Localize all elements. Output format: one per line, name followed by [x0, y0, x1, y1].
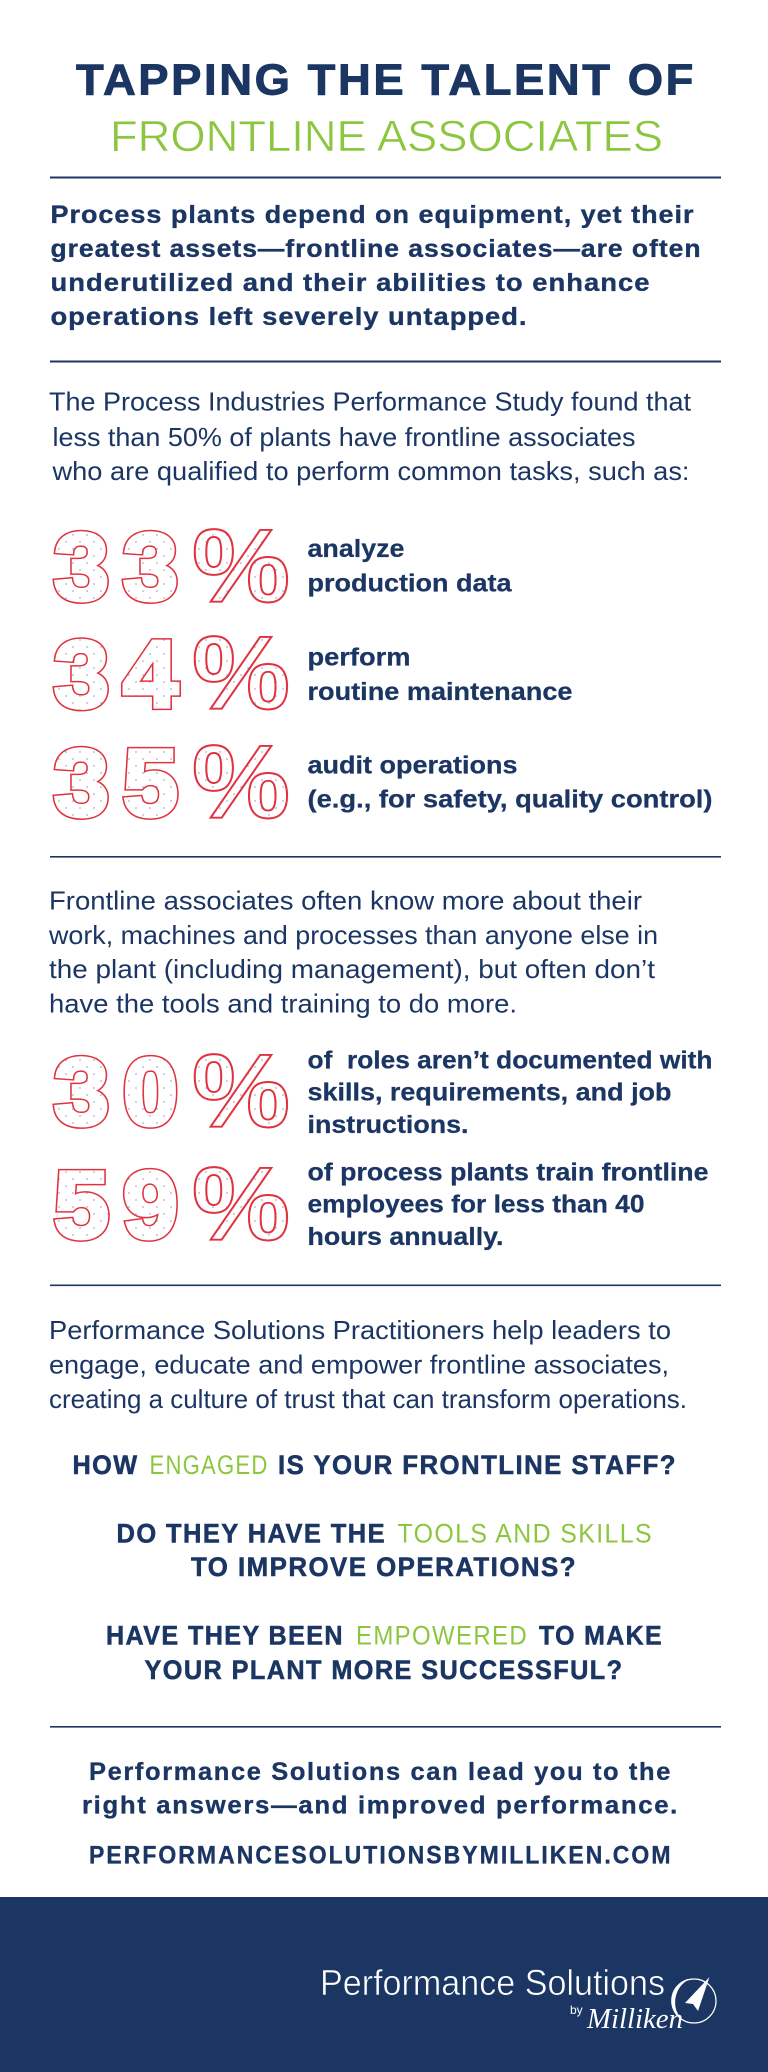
- number: 59%: %: [192, 1146, 290, 1262]
- number: 35%: 3: [54, 730, 109, 836]
- logo: Performance Solutions by Milliken: [320, 1962, 716, 2035]
- label: training hours: [308, 1158, 709, 1251]
- question: engaged: ENGAGED: [150, 1450, 268, 1480]
- question: engaged: IS YOUR FRONTLINE STAFF?: [278, 1450, 677, 1480]
- number: 33%: 3: [123, 514, 178, 620]
- intro statement: operations left severely untapped.: [50, 303, 528, 331]
- frontline knowledge text: Frontline associates often know more about their: [49, 886, 642, 916]
- title: TAPPING THE TALENT OF: [76, 56, 696, 104]
- frontline knowledge text: [48, 886, 658, 1018]
- frontline knowledge text: work, machines and processes than anyone else in: [48, 920, 658, 950]
- question: tools and skills: TOOLS AND SKILLS: [398, 1518, 653, 1548]
- label: training hours: of process plants train frontline: [308, 1158, 709, 1186]
- footer band: [0, 1897, 768, 2072]
- number: 35%: 5: [123, 730, 178, 836]
- number: 30%: 3: [54, 1040, 109, 1146]
- title: FRONTLINE ASSOCIATES: [110, 112, 663, 161]
- intro statement: Process plants depend on equipment, yet their: [50, 201, 694, 229]
- intro statement: greatest assets—frontline associates—are often: [50, 235, 702, 263]
- label: analyze production data: analyze: [308, 535, 405, 563]
- call to action: [82, 1758, 679, 1820]
- number: 30%: 3: [54, 1040, 109, 1146]
- stat: 35% audit operations: [54, 724, 712, 840]
- number: 30%: 0: [123, 1040, 178, 1146]
- number: 35%: 5: [123, 730, 178, 836]
- icon: circle with paper plane: [672, 1977, 716, 2023]
- practitioners text: [49, 1315, 687, 1414]
- stat: 34% perform routine maintenance: [54, 616, 573, 732]
- stat: 30% of roles not documented: [54, 1034, 712, 1150]
- number: 59%: [54, 1146, 290, 1262]
- question: empowered: EMPOWERED: [356, 1620, 528, 1650]
- label: audit operations: (e.g., for safety, quality control): [308, 786, 712, 814]
- question: engaged: [72, 1450, 677, 1480]
- label: perform routine maintenance: perform: [308, 644, 410, 672]
- study introduction text: [49, 386, 692, 486]
- label: training hours: employees for less than 40: [308, 1190, 644, 1218]
- label: roles not documented: instructions.: [308, 1111, 468, 1139]
- number: 33%: 3: [123, 514, 178, 620]
- practitioners text: Performance Solutions Practitioners help leaders to: [49, 1315, 671, 1345]
- number: 34%: %: [192, 616, 290, 732]
- number: 33%: 3: [54, 514, 109, 620]
- title: [76, 56, 696, 161]
- number: 59%: 9: [123, 1152, 178, 1258]
- number: 33%: 3: [54, 514, 109, 620]
- number: 59%: 9: [123, 1152, 178, 1258]
- question: empowered: TO MAKE: [539, 1620, 663, 1650]
- logo: Performance Solutions by Milliken: Milliken: [586, 2003, 683, 2035]
- number: 34%: 4: [123, 622, 178, 728]
- question: empowered: HAVE THEY BEEN: [106, 1620, 344, 1650]
- question: empowered: YOUR PLANT MORE SUCCESSFUL?: [144, 1655, 624, 1685]
- label: roles not documented: of roles aren’t documented with: [308, 1046, 712, 1074]
- number: 35%: 3: [54, 730, 109, 836]
- label: analyze production data: [308, 535, 513, 598]
- logo: Performance Solutions by Milliken: Performance Solutions: [320, 1962, 665, 2003]
- frontline knowledge text: have the tools and training to do more.: [49, 988, 517, 1018]
- number: 30%: %: [192, 1034, 290, 1150]
- label: audit operations: [308, 752, 712, 814]
- practitioners text: creating a culture of trust that can transform operations.: [49, 1384, 687, 1414]
- frontline knowledge text: the plant (including management), but often don’t: [49, 954, 656, 984]
- number: 34%: 3: [54, 622, 109, 728]
- label: training hours: hours annually.: [308, 1223, 504, 1251]
- intro statement: underutilized and their abilities to enhance: [50, 269, 650, 297]
- logo: Performance Solutions by Milliken: by: [570, 2003, 583, 2017]
- number: 59%: 5: [54, 1152, 109, 1258]
- number: 33%: %: [192, 508, 290, 624]
- call to action: right answers—and improved performance.: [82, 1792, 679, 1820]
- number: 34%: 4: [123, 622, 178, 728]
- study introduction text: less than 50% of plants have frontline associates: [52, 422, 636, 452]
- number: 30%: 0: [123, 1040, 178, 1146]
- question: engaged: HOW: [72, 1450, 138, 1480]
- number: 34%: 3: [54, 622, 109, 728]
- study introduction text: who are qualified to perform common tasks, such as:: [51, 456, 689, 486]
- study introduction text: The Process Industries Performance Study found that: [49, 386, 692, 416]
- label: perform routine maintenance: routine maintenance: [308, 678, 573, 706]
- label: perform routine maintenance: [308, 644, 573, 706]
- number: 33%: [54, 508, 290, 624]
- label: audit operations: audit operations: [308, 752, 518, 780]
- call to action: Performance Solutions can lead you to the: [89, 1758, 672, 1786]
- label: roles not documented: [308, 1046, 712, 1139]
- question: tools and skills: [116, 1518, 653, 1582]
- practitioners text: engage, educate and empower frontline associates,: [49, 1350, 669, 1380]
- question: empowered: [106, 1620, 663, 1685]
- label: analyze production data: production data: [308, 570, 513, 598]
- question: tools and skills: TO IMPROVE OPERATIONS?: [191, 1552, 577, 1582]
- number: 30%: [54, 1034, 290, 1150]
- intro statement: [50, 201, 702, 331]
- question: tools and skills: DO THEY HAVE THE: [116, 1518, 386, 1548]
- number: 59%: 5: [54, 1152, 109, 1258]
- number: 35%: [54, 724, 290, 840]
- stat: 59% train under 40 hours: [54, 1146, 709, 1262]
- website url: PERFORMANCESOLUTIONSBYMILLIKEN.COM: [89, 1842, 672, 1870]
- label: roles not documented: skills, requirements, and job: [308, 1078, 672, 1106]
- stat: 33% analyze production data: [54, 508, 513, 624]
- number: 35%: %: [192, 724, 290, 840]
- number: 34%: [54, 616, 290, 732]
